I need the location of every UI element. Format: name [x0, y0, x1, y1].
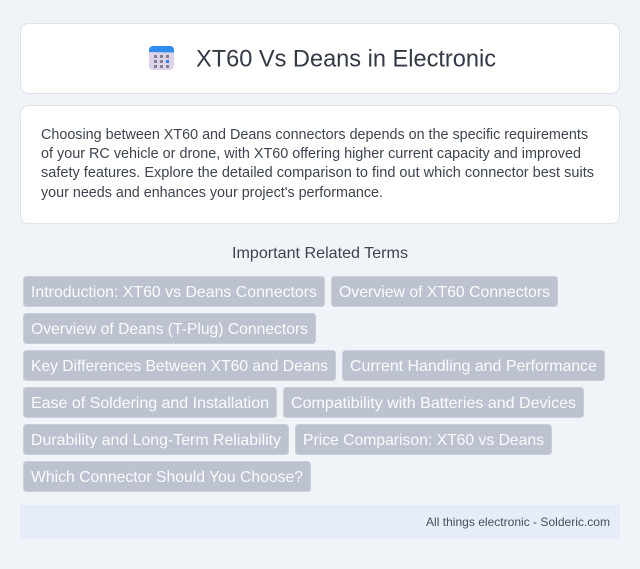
tag: ease of soldering: Ease of Soldering and Installation [31, 395, 269, 412]
tag: overview of Deans [24, 314, 316, 344]
panel: title [20, 24, 620, 94]
tag: current handling: Current Handling and Performance [350, 358, 597, 375]
icon: calendar [149, 46, 174, 70]
tag: overview of XT60 [332, 276, 558, 306]
tag: current handling [342, 350, 604, 380]
tag: durability [24, 424, 288, 454]
footer [20, 505, 620, 539]
tag: introduction [24, 276, 324, 306]
panel: introduction text: of your RC vehicle or drone, with XT60 offering higher current capacity and improved [41, 146, 581, 162]
tag: which connector [24, 462, 310, 492]
tag: key differences: Key Differences Between XT60 and Deans [31, 358, 328, 375]
tag: ease of soldering [24, 388, 276, 418]
tag: price comparison [296, 424, 552, 454]
title text: XT60 Vs Deans in Electronic [196, 46, 496, 72]
tag: introduction: Introduction: XT60 vs Deans Connectors [31, 284, 317, 301]
tag: overview of Deans: Overview of Deans (T-Plug) Connectors [31, 321, 308, 338]
tag: durability: Durability and Long-Term Reliability [31, 432, 281, 449]
tag: which connector: Which Connector Should You Choose? [31, 469, 303, 486]
panel: introduction text: safety features. Explore the detailed comparison to find out which connector best suits [41, 165, 594, 181]
panel: introduction text: Choosing between XT60 and Deans connectors depends on the specific requirements [41, 127, 588, 143]
tag: price comparison: Price Comparison: XT60 vs Deans [303, 432, 544, 449]
tag: compatibility [284, 388, 584, 418]
tag: overview of XT60: Overview of XT60 Connectors [339, 284, 550, 301]
panel: introduction text [20, 106, 620, 224]
panel: introduction text: your needs and enhances your project's performance. [41, 185, 383, 201]
heading: important related terms: Important Related Terms [232, 245, 408, 262]
tag: compatibility: Compatibility with Batteries and Devices [291, 395, 576, 412]
tag: key differences [24, 350, 336, 380]
tag list [24, 276, 604, 492]
footer: All things electronic - Solderic.com [426, 515, 610, 529]
